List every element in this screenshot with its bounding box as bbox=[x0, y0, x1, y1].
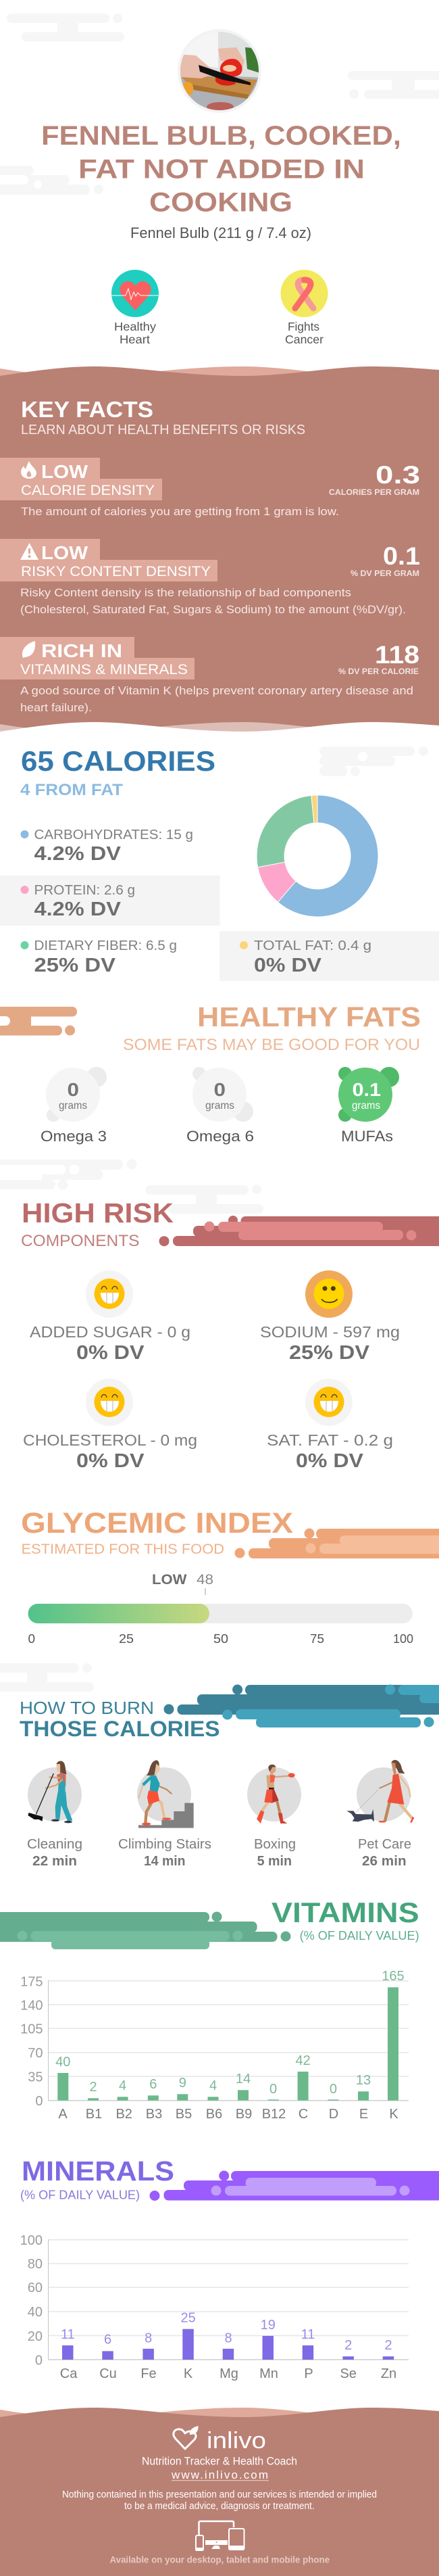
bar chart: minerals: Mg bbox=[220, 2366, 238, 2381]
bar chart: vitamins: 4 bbox=[119, 2078, 126, 2093]
panel: calories bbox=[0, 745, 439, 981]
bar chart: minerals: P bbox=[304, 2366, 313, 2381]
bar chart: vitamins: 35 bbox=[28, 2070, 43, 2085]
fact: risky content density: % DV PER GRAM bbox=[351, 569, 419, 578]
activity: pet care: Pet Care bbox=[358, 1837, 411, 1852]
bar chart: minerals: 0 bbox=[35, 2353, 43, 2368]
fact: rich in vitamins and minerals: heart failure). bbox=[20, 701, 92, 714]
bar chart: minerals: 6 bbox=[104, 2333, 111, 2347]
activity: cleaning: Cleaning bbox=[27, 1837, 82, 1852]
bar chart: minerals: 11 bbox=[301, 2327, 315, 2342]
benefit: healthy heart bbox=[111, 270, 159, 346]
risk: cholesterol: CHOLESTEROL - 0 mg bbox=[23, 1431, 197, 1449]
bar chart: minerals: 100 bbox=[20, 2233, 43, 2248]
bar chart: vitamins: 165 bbox=[382, 1969, 405, 1984]
gauge: glycemic value: 25 bbox=[119, 1631, 134, 1646]
ribbon: vitamins bbox=[0, 1912, 290, 1949]
bar chart: minerals bbox=[20, 2233, 409, 2381]
legend: protein: PROTEIN: 2.6 g bbox=[34, 883, 135, 898]
risk: saturated fat: 0% DV bbox=[296, 1450, 364, 1472]
risk: saturated fat bbox=[267, 1379, 393, 1472]
activity: boxing: 5 min bbox=[257, 1854, 292, 1869]
activity: climbing stairs bbox=[118, 1760, 211, 1869]
bar chart: vitamins: 42 bbox=[295, 2053, 311, 2068]
gauge: glycemic value: 100 bbox=[393, 1631, 413, 1646]
benefit: healthy heart: Heart bbox=[120, 333, 150, 346]
fact: rich in vitamins and minerals: RICH IN bbox=[41, 640, 122, 661]
header: food photo bbox=[177, 29, 262, 115]
activity: boxing: Boxing bbox=[254, 1837, 296, 1852]
ribbon: minerals bbox=[150, 2170, 439, 2201]
bar chart: vitamins bbox=[20, 1969, 409, 2122]
bar chart: minerals: 60 bbox=[28, 2281, 43, 2295]
subheading: percent of daily value: (% OF DAILY VALUE) bbox=[300, 1928, 419, 1942]
ribbon: burn calories bbox=[163, 1685, 439, 1727]
fact: risky content density: 0.1 bbox=[383, 542, 420, 570]
fact: risky content density: LOW bbox=[41, 542, 88, 563]
bar chart: vitamins: B3 bbox=[146, 2107, 162, 2122]
bar chart: vitamins: 9 bbox=[179, 2076, 186, 2091]
risk: added sugar: ADDED SUGAR - 0 g bbox=[30, 1323, 190, 1341]
heading: those calories: THOSE CALORIES bbox=[20, 1717, 220, 1741]
risk: added sugar: 0% DV bbox=[76, 1342, 145, 1364]
panel: healthy fats bbox=[0, 1001, 421, 1145]
title: FENNEL BULB, COOKED, bbox=[41, 121, 401, 151]
risk: sodium: SODIUM - 597 mg bbox=[260, 1323, 400, 1341]
benefit: fights cancer bbox=[281, 270, 328, 346]
fact: calorie density: CALORIE DENSITY bbox=[21, 483, 155, 498]
fact: rich in vitamins and minerals bbox=[0, 637, 419, 714]
legend: total fat: TOTAL FAT: 0.4 g bbox=[254, 938, 371, 953]
bar chart: minerals: 19 bbox=[261, 2318, 276, 2333]
icon: devices bbox=[195, 2521, 244, 2551]
heading: how to burn: HOW TO BURN bbox=[20, 1698, 154, 1718]
logo: inlivo bbox=[174, 2426, 266, 2454]
bar chart: minerals: 8 bbox=[145, 2331, 152, 2346]
bar chart: vitamins: 70 bbox=[28, 2046, 43, 2061]
subheading: key facts: LEARN ABOUT HEALTH BENEFITS OR RISKS bbox=[21, 423, 305, 437]
disclaimer: Nothing contained in this presentation and our services is intended or implied bbox=[62, 2489, 377, 2500]
title: FAT NOT ADDED IN bbox=[78, 154, 365, 184]
stat: MUFAs: MUFAs bbox=[341, 1128, 393, 1145]
bar chart: minerals: Zn bbox=[381, 2366, 396, 2381]
title: COOKING bbox=[149, 188, 292, 218]
legend: total fat: 0% DV bbox=[254, 955, 322, 976]
fact: calorie density: 0.3 bbox=[376, 461, 420, 489]
bar chart: minerals: 2 bbox=[344, 2338, 352, 2353]
risk: sodium bbox=[260, 1270, 400, 1364]
heading: healthy fats: HEALTHY FATS bbox=[197, 1001, 421, 1032]
legend: protein: 4.2% DV bbox=[34, 899, 122, 920]
bar chart: vitamins: B1 bbox=[86, 2107, 102, 2122]
bar chart: minerals: Fe bbox=[140, 2366, 157, 2381]
benefit: fights cancer: Fights bbox=[288, 320, 319, 333]
bar chart: minerals: 80 bbox=[28, 2257, 43, 2272]
bar chart: vitamins: D bbox=[329, 2107, 338, 2122]
bar chart: minerals: 11 bbox=[61, 2327, 75, 2342]
bar chart: minerals: 8 bbox=[224, 2331, 232, 2346]
gauge: glycemic value: 75 bbox=[310, 1631, 324, 1646]
activity: boxing bbox=[247, 1765, 301, 1869]
panel: key facts bbox=[0, 366, 439, 744]
bar chart: minerals: Mn bbox=[259, 2366, 278, 2381]
activity: climbing stairs: Climbing Stairs bbox=[118, 1837, 211, 1852]
bar chart: vitamins: B12 bbox=[262, 2107, 286, 2122]
subheading: from fat: 4 FROM FAT bbox=[20, 781, 123, 799]
bar chart: minerals: 25 bbox=[180, 2311, 196, 2326]
panel: vitamins bbox=[0, 1897, 419, 2122]
benefit: healthy heart: Healthy bbox=[114, 320, 156, 333]
risk: cholesterol: 0% DV bbox=[76, 1450, 145, 1472]
bar chart: vitamins: 0 bbox=[35, 2094, 43, 2109]
legend: total fat bbox=[220, 931, 439, 981]
bar chart: minerals: 2 bbox=[384, 2338, 392, 2353]
bar chart: minerals: Se bbox=[340, 2366, 357, 2381]
legend: protein bbox=[0, 876, 220, 926]
ribbon: glycemic index bbox=[235, 1528, 439, 1558]
disclaimer bbox=[62, 2489, 377, 2512]
panel: glycemic index bbox=[21, 1507, 439, 1646]
bar chart: minerals: Ca bbox=[60, 2366, 78, 2381]
bar chart: vitamins: 175 bbox=[20, 1974, 43, 1989]
ribbon: healthy fats bbox=[0, 1007, 77, 1036]
activity: pet care bbox=[346, 1760, 414, 1869]
activity: pet care: 26 min bbox=[362, 1854, 407, 1869]
stat: MUFAs: 0.1 bbox=[353, 1079, 381, 1100]
subheading: healthy fats: SOME FATS MAY BE GOOD FOR YOU bbox=[123, 1036, 420, 1054]
website link: www.inlivo.com bbox=[171, 2468, 268, 2481]
donut chart bbox=[257, 795, 378, 917]
heading: key facts: KEY FACTS bbox=[21, 397, 153, 422]
heading: 65 calories: 65 CALORIES bbox=[21, 745, 215, 777]
bar chart: vitamins: 4 bbox=[209, 2078, 217, 2093]
bar chart: vitamins: 13 bbox=[356, 2073, 371, 2088]
heading: minerals: MINERALS bbox=[22, 2155, 174, 2187]
risk: sodium: 25% DV bbox=[289, 1342, 370, 1364]
fact: calorie density: LOW bbox=[41, 461, 88, 482]
panel: how to burn those calories bbox=[20, 1685, 439, 1869]
ribbon: high risk bbox=[159, 1216, 439, 1246]
bar chart: vitamins: B9 bbox=[236, 2107, 252, 2122]
subheading: glycemic index: ESTIMATED FOR THIS FOOD bbox=[22, 1541, 224, 1557]
bar chart: vitamins: K bbox=[389, 2107, 398, 2122]
panel: high risk components bbox=[21, 1197, 439, 1472]
title bbox=[41, 121, 401, 218]
fact: risky content density: (Cholesterol, Saturated Fat, Sugars & Sodium) to the amount (%DV/gr). bbox=[20, 603, 406, 616]
gauge: glycemic value: 0 bbox=[28, 1631, 35, 1646]
legend: carbohydrates bbox=[20, 828, 193, 865]
bar chart: vitamins: 140 bbox=[20, 1999, 43, 2013]
stat: MUFAs bbox=[338, 1067, 399, 1145]
bar chart: vitamins: 40 bbox=[55, 2055, 70, 2070]
stat: omega 6: 0 bbox=[213, 1079, 226, 1100]
stat: omega 6: grams bbox=[205, 1100, 234, 1112]
bar chart: minerals: Cu bbox=[99, 2366, 117, 2381]
heading: high risk: HIGH RISK bbox=[22, 1197, 174, 1229]
subheading: components: COMPONENTS bbox=[21, 1232, 139, 1250]
logo: inlivo: inlivo bbox=[207, 2428, 266, 2454]
subheading: percent of daily value: (% OF DAILY VALUE) bbox=[20, 2188, 140, 2201]
heading: vitamins: VITAMINS bbox=[272, 1897, 419, 1928]
heading: glycemic index: GLYCEMIC INDEX bbox=[21, 1507, 293, 1540]
gauge: glycemic value bbox=[28, 1572, 413, 1646]
legend: dietary fiber: 25% DV bbox=[34, 955, 116, 976]
panel: minerals bbox=[20, 2155, 439, 2381]
fact: calorie density: The amount of calories you are getting from 1 gram is low. bbox=[21, 505, 339, 518]
gauge: glycemic value: 50 bbox=[213, 1631, 228, 1646]
stat: omega 6 bbox=[186, 1067, 254, 1145]
bar chart: minerals: 40 bbox=[28, 2305, 43, 2320]
bar chart: vitamins: 2 bbox=[89, 2080, 97, 2095]
fact: calorie density bbox=[0, 458, 420, 518]
bar chart: vitamins: 0 bbox=[330, 2082, 337, 2097]
stat: omega 3: Omega 3 bbox=[41, 1128, 107, 1145]
bar chart: vitamins: 0 bbox=[269, 2082, 277, 2097]
stat: omega 3: grams bbox=[59, 1100, 87, 1112]
bar chart: minerals: 20 bbox=[28, 2329, 43, 2344]
bar chart: vitamins: 14 bbox=[236, 2072, 251, 2086]
bar chart: minerals: K bbox=[184, 2366, 193, 2381]
gauge: glycemic value: LOW bbox=[152, 1572, 187, 1588]
risk: saturated fat: SAT. FAT - 0.2 g bbox=[267, 1431, 393, 1449]
activity: cleaning bbox=[27, 1761, 82, 1869]
bar chart: vitamins: 6 bbox=[149, 2077, 157, 2092]
disclaimer: to be a medical advice, diagnosis or treatment. bbox=[124, 2501, 315, 2512]
stat: omega 3: 0 bbox=[68, 1079, 79, 1100]
bar chart: vitamins: E bbox=[359, 2107, 368, 2122]
fact: rich in vitamins and minerals: % DV PER CALORIE bbox=[338, 667, 419, 676]
fact: rich in vitamins and minerals: A good source of Vitamin K (helps prevent coronary artery disease and bbox=[20, 684, 413, 697]
bar chart: vitamins: B6 bbox=[206, 2107, 222, 2122]
serving size: Fennel Bulb (211 g / 7.4 oz) bbox=[130, 224, 311, 241]
bar chart: vitamins: B2 bbox=[115, 2107, 132, 2122]
bar chart: vitamins: C bbox=[299, 2107, 308, 2122]
legend: carbohydrates: CARBOHYDRATES: 15 g bbox=[34, 828, 193, 842]
fact: risky content density: RISKY CONTENT DENSITY bbox=[21, 564, 211, 579]
fact: rich in vitamins and minerals: 118 bbox=[375, 641, 419, 669]
panel: footer bbox=[0, 2408, 439, 2576]
tagline: Nutrition Tracker & Health Coach bbox=[142, 2454, 297, 2468]
stat: omega 6: Omega 6 bbox=[186, 1128, 254, 1145]
fact: calorie density: CALORIES PER GRAM bbox=[329, 487, 419, 497]
legend: dietary fiber bbox=[20, 938, 177, 976]
fact: risky content density: Risky Content density is the relationship of bad components bbox=[20, 586, 351, 599]
activity: cleaning: 22 min bbox=[32, 1854, 77, 1869]
fact: risky content density bbox=[0, 539, 420, 616]
fact: rich in vitamins and minerals: VITAMINS & MINERALS bbox=[20, 662, 188, 677]
bar chart: vitamins: A bbox=[58, 2107, 68, 2122]
availability note: Available on your desktop, tablet and mobile phone bbox=[109, 2554, 330, 2565]
risk: cholesterol bbox=[23, 1379, 197, 1472]
bar chart: vitamins: B5 bbox=[176, 2107, 192, 2122]
stat: omega 3 bbox=[41, 1067, 107, 1145]
gauge: glycemic value: 48 bbox=[197, 1572, 213, 1588]
benefit: fights cancer: Cancer bbox=[285, 333, 324, 346]
risk: added sugar bbox=[30, 1270, 190, 1364]
activity: climbing stairs: 14 min bbox=[144, 1854, 185, 1869]
legend: carbohydrates: 4.2% DV bbox=[34, 843, 122, 865]
stat: MUFAs: grams bbox=[352, 1100, 380, 1112]
bar chart: vitamins: 105 bbox=[20, 2022, 43, 2036]
legend: dietary fiber: DIETARY FIBER: 6.5 g bbox=[34, 938, 177, 953]
